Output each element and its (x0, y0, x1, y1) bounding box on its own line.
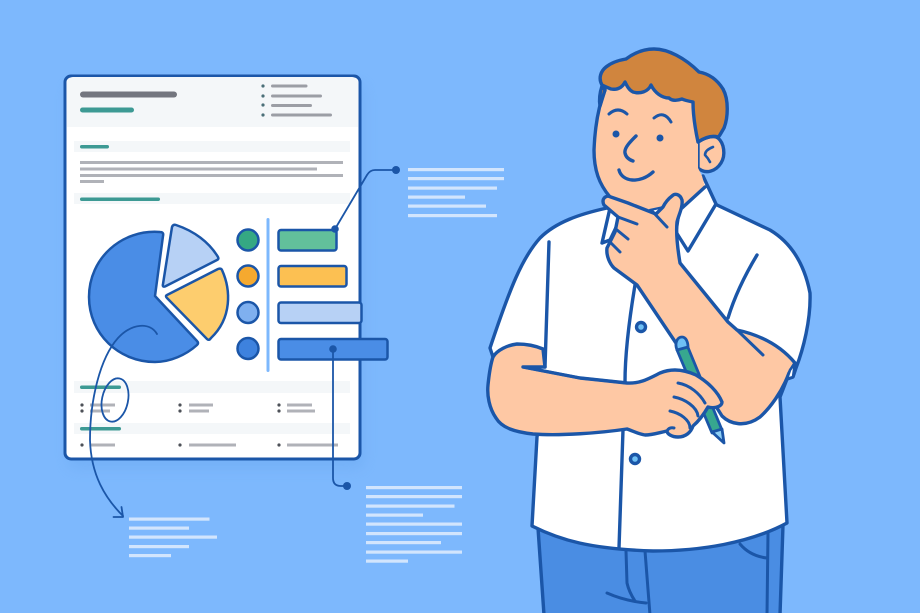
sideburn (600, 86, 605, 106)
shirt (490, 170, 810, 551)
right forearm and chin hand (603, 194, 795, 424)
header bullet list (261, 84, 332, 117)
pen (676, 337, 724, 443)
chart section heading (74, 193, 350, 204)
report title lines (80, 92, 177, 112)
character: thinking man (488, 49, 810, 613)
left arm and writing hand (488, 344, 722, 437)
button: upper (636, 322, 646, 332)
lower section B (74, 423, 350, 447)
annotation: curved arrow with oval (90, 326, 157, 517)
collar: right (676, 176, 716, 251)
ear (698, 137, 724, 172)
left eye (612, 130, 620, 138)
collar: left (602, 208, 622, 243)
nose (625, 136, 636, 161)
button: lower (630, 454, 640, 464)
annotation: connector to lower notes (329, 345, 351, 490)
pie chart (89, 225, 228, 362)
panel: report document (65, 76, 388, 468)
notes: lower left (129, 518, 217, 557)
undershirt collar sliver (650, 207, 664, 219)
face and neck (594, 75, 705, 222)
summary section (74, 141, 350, 183)
legend dots (238, 230, 258, 359)
annotation: connector to top notes (331, 166, 400, 233)
right eye (656, 134, 664, 142)
hair (600, 49, 727, 142)
trousers (538, 525, 783, 613)
lower section A (74, 381, 350, 413)
right sleeve cuff (787, 363, 795, 379)
left eyebrow (609, 110, 627, 114)
smile (619, 170, 653, 180)
legend bars (278, 230, 388, 360)
right eyebrow (654, 115, 671, 122)
notes: top right (408, 168, 504, 217)
divider (266, 218, 270, 372)
notes: lower right (366, 486, 462, 563)
